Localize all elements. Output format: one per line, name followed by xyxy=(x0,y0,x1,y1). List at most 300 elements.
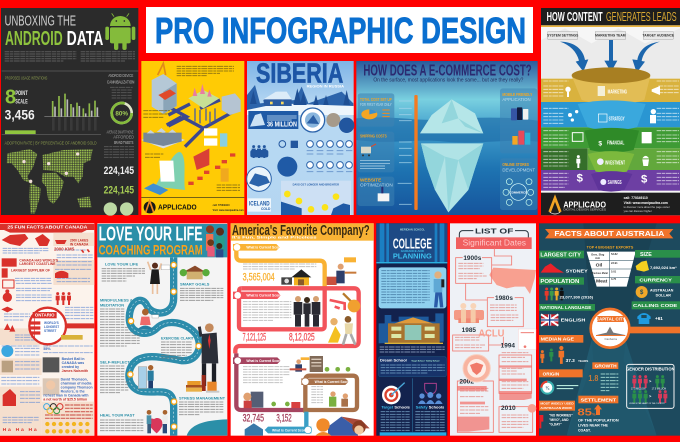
size xyxy=(635,250,680,272)
bottom family xyxy=(315,417,370,436)
capital city magnifier: Canberra xyxy=(604,337,617,341)
top labels: TARGET AUDIENCE xyxy=(643,34,675,38)
dotted world map xyxy=(7,149,93,213)
colour bands xyxy=(541,79,680,191)
numbers: 32,745 xyxy=(243,413,264,425)
total cost panel xyxy=(358,93,394,127)
panel: android data xyxy=(1,8,138,216)
online stores panel xyxy=(500,158,537,210)
year labels xyxy=(459,254,516,412)
iceland label: COLD xyxy=(261,207,271,211)
three business people xyxy=(294,296,320,327)
red callout xyxy=(193,148,209,170)
panel: siberia xyxy=(247,57,354,215)
top labels: SYSTEM SETTINGS xyxy=(547,34,579,38)
largest city xyxy=(539,251,588,274)
gender distribution xyxy=(626,364,675,408)
olympics text xyxy=(45,405,93,418)
woman in dress xyxy=(148,262,170,294)
mobile friendly panel xyxy=(500,88,537,153)
america header: It's Fun, Simple and Priceless xyxy=(232,235,318,240)
icons population xyxy=(250,141,298,158)
funnel labels: $ xyxy=(598,140,602,147)
college header: COLLEGE xyxy=(393,236,432,252)
shipping costs panel: SHIPPING COSTS xyxy=(360,134,387,140)
numbers: 7,121,125 xyxy=(243,332,266,344)
fact headings: IN CANADA xyxy=(70,242,89,246)
office scene xyxy=(290,356,350,372)
brown tag: What is Current Score? xyxy=(315,380,352,384)
college header: MERIDIAN SCHOOL xyxy=(400,228,425,232)
website panel: WEBSITE xyxy=(360,178,381,183)
national language: ENGLISH xyxy=(561,318,586,324)
gender distribution: 17.5 MILLION xyxy=(631,388,646,390)
size: 7,692,024 km² xyxy=(650,266,678,270)
australia banner xyxy=(545,229,673,250)
connector lines and boxes xyxy=(453,248,533,432)
donut chart 80% xyxy=(112,103,132,123)
online stores panel: ONLINE STORES xyxy=(502,162,529,168)
stat labels xyxy=(107,129,135,145)
funnel labels: MARKETING xyxy=(608,89,627,95)
coaching header xyxy=(97,224,227,257)
fact headings: 2000 KMS xyxy=(54,247,75,252)
national language xyxy=(539,304,595,326)
canada and russia maps xyxy=(2,234,50,246)
settlement: SETTLEMENT xyxy=(581,397,616,403)
settlement xyxy=(577,396,619,432)
website panel: OPTIMIZATION xyxy=(360,183,393,188)
isometric road xyxy=(167,100,233,147)
lower facts: 55% xyxy=(43,347,51,351)
college header: PLANNING xyxy=(393,253,432,260)
exports table: 52.82 xyxy=(611,252,618,256)
road pins xyxy=(128,262,201,429)
lower facts: Basket Ball in xyxy=(62,357,85,361)
currency xyxy=(635,276,680,298)
origin: ORIGIN xyxy=(543,371,560,376)
numbers: 8,12,025 xyxy=(289,332,315,344)
year labels: 2010 xyxy=(501,405,516,412)
white cards xyxy=(204,128,227,147)
iceland label: ICELAND xyxy=(249,202,270,208)
snowy landscape xyxy=(247,85,354,115)
iceland label xyxy=(248,198,271,212)
stat numbers 224,145: 224,145 xyxy=(104,185,134,197)
dream school box: Target School · Safety School xyxy=(411,360,440,363)
meditating woman xyxy=(137,309,159,329)
list heading: LIST OF xyxy=(475,226,514,235)
applicado footer: call: 770349110 xyxy=(213,204,230,207)
lower facts: chairman of media xyxy=(61,382,92,386)
icon rows xyxy=(307,141,352,168)
usage intentions text: 3,456 xyxy=(5,106,35,122)
twitter bird circle xyxy=(1,345,13,357)
gender distribution: > xyxy=(649,378,652,383)
calling code: CALLING CODE xyxy=(633,303,678,309)
gender distribution: > xyxy=(649,393,652,398)
red tag xyxy=(233,292,283,299)
document on gradient hill xyxy=(144,152,185,195)
red highlight bars xyxy=(457,365,532,432)
water band xyxy=(356,117,538,143)
funnel labels xyxy=(597,86,627,186)
schools labels: Target Schools xyxy=(381,405,411,410)
website panel xyxy=(358,177,394,206)
most used word: MOST WIDELY USED xyxy=(540,402,575,406)
band icons: $ xyxy=(641,174,648,186)
siberia heading: REGION IN RUSSIA xyxy=(307,84,344,88)
schools labels: Safety Schools xyxy=(416,405,445,410)
park with people xyxy=(188,84,219,108)
exports table xyxy=(587,252,636,287)
medallions xyxy=(301,108,354,133)
mobile friendly panel: APPLICATION xyxy=(502,97,531,102)
coaching section headings: STRESS MANAGEMENT xyxy=(179,395,226,400)
numbers: 3,565,004 xyxy=(243,272,275,284)
lower left building and man xyxy=(243,392,300,408)
36 million stat xyxy=(248,111,298,129)
cream blocks xyxy=(0,233,94,436)
ontario magnifier callout: LONGEST xyxy=(44,325,59,329)
australia banner: FACTS ABOUT AUSTRALIA xyxy=(554,229,665,238)
blue tag: What is Current Score? xyxy=(272,428,309,432)
exports table: 5.01 xyxy=(611,270,617,274)
house and camera xyxy=(281,269,311,285)
maroon tag: What is Current Score? xyxy=(246,359,283,363)
currency: AUSTRALIAN xyxy=(650,288,674,292)
currency: CURRENCY xyxy=(639,278,673,284)
year labels: 1900s xyxy=(463,255,482,262)
cyan footer xyxy=(380,432,446,436)
right building xyxy=(222,93,241,115)
panel: facts about australia xyxy=(539,223,680,436)
bar chart xyxy=(44,94,99,131)
ontario magnifier callout: STREET xyxy=(44,329,57,333)
exports table: Oil xyxy=(596,263,603,269)
fact row text xyxy=(3,248,93,340)
stack of crates xyxy=(221,168,229,182)
fact headings: LARGEST COASTLINE xyxy=(19,262,56,266)
red small boxes xyxy=(188,153,235,185)
header bar xyxy=(541,8,680,27)
median age: YEARS xyxy=(578,359,588,363)
sun chart xyxy=(281,181,351,215)
blue circle stat xyxy=(277,157,297,177)
coaching section headings: MEDITATION xyxy=(100,303,124,308)
exports table: 22.91 xyxy=(611,261,618,265)
settlement: 85 xyxy=(577,407,593,418)
college building xyxy=(379,313,444,344)
body text xyxy=(243,264,323,403)
numbers: 3,152 xyxy=(276,413,292,425)
mirror and man xyxy=(138,365,154,388)
year labels: 1994 xyxy=(501,342,515,349)
currency: DOLLAR xyxy=(656,293,671,297)
small red icons xyxy=(1,240,89,332)
america header xyxy=(231,223,374,241)
most used word: "NO WORRIES" xyxy=(549,414,573,418)
list heading xyxy=(456,226,532,249)
capital city magnifier xyxy=(591,309,680,348)
usage intentions text: PROPOSED USAGE INTENTIONS xyxy=(5,75,47,80)
island map circle xyxy=(247,167,271,191)
iceberg xyxy=(420,99,483,212)
lower facts: CANADA was xyxy=(62,361,84,365)
panel: college planning xyxy=(376,223,447,436)
iceberg heading: HOW DOES A E-COMMERCE COST? xyxy=(363,62,532,79)
funnel labels: FINANCIAL xyxy=(607,141,625,147)
title banner: PRO INFOGRAPHIC DESIGN xyxy=(155,10,526,51)
meeting scene xyxy=(329,391,348,407)
stat labels: AFFORDED xyxy=(113,135,135,140)
heading ribbon xyxy=(0,224,94,233)
australia banner: TOP 4 BIGGEST EXPORTS xyxy=(587,246,634,250)
gender distribution: LIVING IN THE HEART OF THE COUNTRY xyxy=(629,402,666,405)
student card xyxy=(379,267,446,308)
college header xyxy=(376,223,447,263)
largest city: LARGEST CITY xyxy=(540,253,581,259)
coaching text blocks xyxy=(100,269,223,431)
ontario magnifier callout: WORLD'S xyxy=(44,321,59,325)
band icons: $ xyxy=(577,173,584,185)
funnel labels: SAVINGS xyxy=(608,180,622,186)
fact headings: LARGEST SUPPLIER OF xyxy=(11,269,50,273)
android heading: DATA xyxy=(67,28,103,50)
icon: android robot xyxy=(105,13,135,50)
exports table: Meat xyxy=(596,279,608,285)
android heading xyxy=(5,13,103,50)
panel: canada facts xyxy=(0,223,94,436)
brown tag xyxy=(301,378,352,385)
portrait photo xyxy=(2,361,13,372)
most used word: "MIVO", AND xyxy=(549,418,569,422)
growth: GROWTH xyxy=(595,363,617,368)
stat numbers 224,145: 224,145 xyxy=(104,165,134,177)
currency: $ xyxy=(640,290,644,296)
gender distribution: GENDER DISTRIBUTION xyxy=(626,367,675,372)
usa map xyxy=(489,268,536,294)
sofa with couple xyxy=(454,303,484,323)
mobile friendly panel: MOBILE FRIENDLY xyxy=(502,92,533,98)
settlement: LIVES NEAR THE xyxy=(578,423,609,427)
siberia heading: SIBERIA xyxy=(256,57,344,88)
coaching section headings: MINDFULNESS & xyxy=(100,298,133,303)
calling code: +61 xyxy=(655,316,663,321)
calling code xyxy=(632,301,680,324)
house and trees xyxy=(180,266,210,279)
population: 23,077,300 (2016) xyxy=(560,296,594,300)
total cost panel: FOR FIRST YEAR ONLY xyxy=(360,102,392,107)
santa icon xyxy=(3,389,16,406)
coaching section headings: LOVE YOUR LIFE xyxy=(105,262,138,267)
donut chart 80%: 80% xyxy=(115,110,128,117)
orange tag xyxy=(233,244,283,251)
year labels: 1980s xyxy=(495,295,513,302)
top labels: MARKETING TEAM xyxy=(595,34,626,38)
year labels: 2002 xyxy=(459,378,474,385)
funnel labels: INVESTMENT xyxy=(605,160,625,166)
couple with broken heart xyxy=(147,410,168,433)
title banner xyxy=(146,7,533,53)
dream school box: Dream School xyxy=(380,358,407,363)
online stores panel: COMMERCE xyxy=(509,190,527,194)
usage intentions text: SCALE xyxy=(15,99,28,105)
android heading: ANDROID xyxy=(5,28,63,50)
sun chart: DAYS GET LONGER AND BRIGHTER xyxy=(293,183,339,187)
median age xyxy=(539,335,588,364)
panel: coaching program xyxy=(97,223,227,436)
android heading: UNBOXING THE xyxy=(5,13,76,29)
crowd of people xyxy=(195,108,215,124)
aclu mark: ACLU xyxy=(478,329,504,340)
bottom house xyxy=(245,423,263,436)
funnel labels: STRATEGY xyxy=(609,117,625,123)
exports table: Precious Metal xyxy=(591,272,608,275)
capital city magnifier: CAPITAL CITY xyxy=(596,317,625,322)
band side text xyxy=(543,81,679,187)
origin: ¼ xyxy=(546,385,550,390)
largest city: SYDNEY xyxy=(566,268,588,274)
dancing couple xyxy=(328,316,355,345)
applicado footer: APPLICADO xyxy=(158,202,197,211)
target icon xyxy=(382,383,405,404)
coaching section headings: SMART GOALS xyxy=(180,282,210,287)
applicado footer: Visit: www.manipaultra.com xyxy=(213,209,244,212)
coaching section headings: SELF-REFLECTION xyxy=(100,359,137,364)
lower facts: richest man in Canada with xyxy=(43,394,88,398)
safety icon people xyxy=(418,383,443,404)
maroon tag xyxy=(233,357,283,364)
stat labels: BRAND TWEETS xyxy=(114,140,133,145)
footer with logo: DIGITAL DESIGN SERVICES xyxy=(563,209,607,212)
heading ribbon: 25 FUN FACTS ABOUT CANADA xyxy=(7,224,88,229)
photo card xyxy=(518,329,536,350)
footer with logo: APPLICADO xyxy=(563,200,606,209)
olympic rings xyxy=(44,404,63,414)
family illustration xyxy=(206,225,225,257)
dream school box xyxy=(379,357,446,377)
settlement: COAST. xyxy=(578,428,591,432)
panel: yellow city infographic xyxy=(141,61,244,215)
usage intentions text xyxy=(5,75,47,134)
coaching section headings: EXERCISE CLARITY xyxy=(161,336,197,340)
building text xyxy=(380,347,445,352)
shipping costs panel xyxy=(358,132,394,172)
footer with logo: you can discover higher xyxy=(624,209,652,213)
origin xyxy=(539,369,583,394)
fact headings: 2000 LAKES xyxy=(70,239,89,243)
settlement: % xyxy=(592,411,596,416)
left houses island xyxy=(141,128,185,148)
fact headings: CANADA HAS WORLD'S xyxy=(19,259,59,263)
national language: NATIONAL LANGUAGE xyxy=(540,305,591,310)
college header: GUIDANCE AND xyxy=(401,249,425,253)
growth: 1.8 xyxy=(588,373,598,383)
timeline paths xyxy=(235,248,359,430)
panel: e-commerce iceberg xyxy=(356,61,538,215)
settlement: OF THE POPULATION xyxy=(578,418,619,422)
total cost panel: TOTAL COST SET UP xyxy=(360,97,392,103)
adoption heading: ADOPTION RATE | BY PERCENTAGE OF ANDROID SOLD xyxy=(5,141,97,147)
footer with logo: Visit: www.manipaultra.com xyxy=(624,201,668,205)
lower facts: a net worth of $25.5 billion xyxy=(43,398,87,402)
lower facts: created by xyxy=(62,365,79,369)
exports table: 3.75 xyxy=(611,277,617,281)
thinking businessman xyxy=(199,323,218,386)
food and drink xyxy=(186,375,219,393)
gender distribution: 17.0 MILLION xyxy=(652,388,666,390)
gold medals xyxy=(45,422,89,433)
lower facts xyxy=(43,335,93,402)
ontario magnifier callout: ONTARIO xyxy=(35,313,55,318)
applicado footer xyxy=(141,197,244,213)
coaching header: LOVE YOUR LIFE xyxy=(99,224,203,246)
footer with logo: call: 770349110 xyxy=(624,196,648,200)
stat numbers 224,145 xyxy=(104,165,134,216)
winding road xyxy=(129,257,199,436)
usage intentions text: POINT xyxy=(15,91,28,97)
panel: list of significant dates xyxy=(450,223,536,436)
tower building xyxy=(152,63,177,114)
ontario magnifier callout xyxy=(29,308,94,344)
exports table: Ash xyxy=(595,256,601,260)
usage intentions text: 8 xyxy=(5,87,16,109)
iceberg heading: On the surface, most applications look the same... but are they really? xyxy=(373,78,523,84)
footer with logo xyxy=(541,193,680,215)
blue arrows xyxy=(560,40,660,73)
coaching section headings: HEAL YOUR PAST xyxy=(100,413,135,418)
lower facts: David Thomson, xyxy=(61,378,88,382)
panel: android data: AVERAGE SMARTPHONE xyxy=(107,129,133,134)
lower facts: James Naismith xyxy=(62,369,88,373)
coaching section headings xyxy=(100,262,226,418)
guitar and music notes xyxy=(330,293,360,312)
ha ha ha: Ha Ha Ha xyxy=(3,427,37,433)
panel: content generates leads xyxy=(541,8,680,215)
online stores panel: DEVELOPMENT xyxy=(502,167,535,172)
top text block xyxy=(177,66,234,76)
numbers xyxy=(243,272,315,425)
device cannibalization heading xyxy=(107,73,135,86)
coaching header: COACHING PROGRAM xyxy=(99,241,203,257)
36 million stat: 36 MILLION xyxy=(267,119,297,128)
america header: America's Favorite Company? xyxy=(232,223,370,239)
teal corner signature xyxy=(187,419,227,436)
growth xyxy=(588,362,618,391)
panel: america's favorite company xyxy=(231,223,374,436)
most used word: "G,DAY" xyxy=(549,422,562,426)
orange depth bar xyxy=(414,95,418,210)
year labels: 1985 xyxy=(462,327,476,334)
median age: 37.3 xyxy=(566,358,575,363)
lower facts: company Thomson xyxy=(61,386,93,390)
small pink badge xyxy=(528,404,536,413)
funnel xyxy=(572,67,650,192)
lower facts: Reuters, is the xyxy=(61,390,85,394)
top labels xyxy=(547,32,675,39)
orange tag: What is Current Score? xyxy=(246,246,283,250)
red tag: What is Current Score? xyxy=(246,294,283,298)
median age: MEDIAN AGE xyxy=(541,337,574,342)
blue tag xyxy=(265,426,312,434)
device cannibalization heading: ANDROID DEVICE xyxy=(108,73,134,79)
schools labels xyxy=(381,405,445,410)
date text xyxy=(455,263,528,427)
most used word xyxy=(539,401,575,428)
iceberg heading xyxy=(363,62,532,84)
device cannibalization heading: CANNIBALIZATION xyxy=(107,80,135,86)
